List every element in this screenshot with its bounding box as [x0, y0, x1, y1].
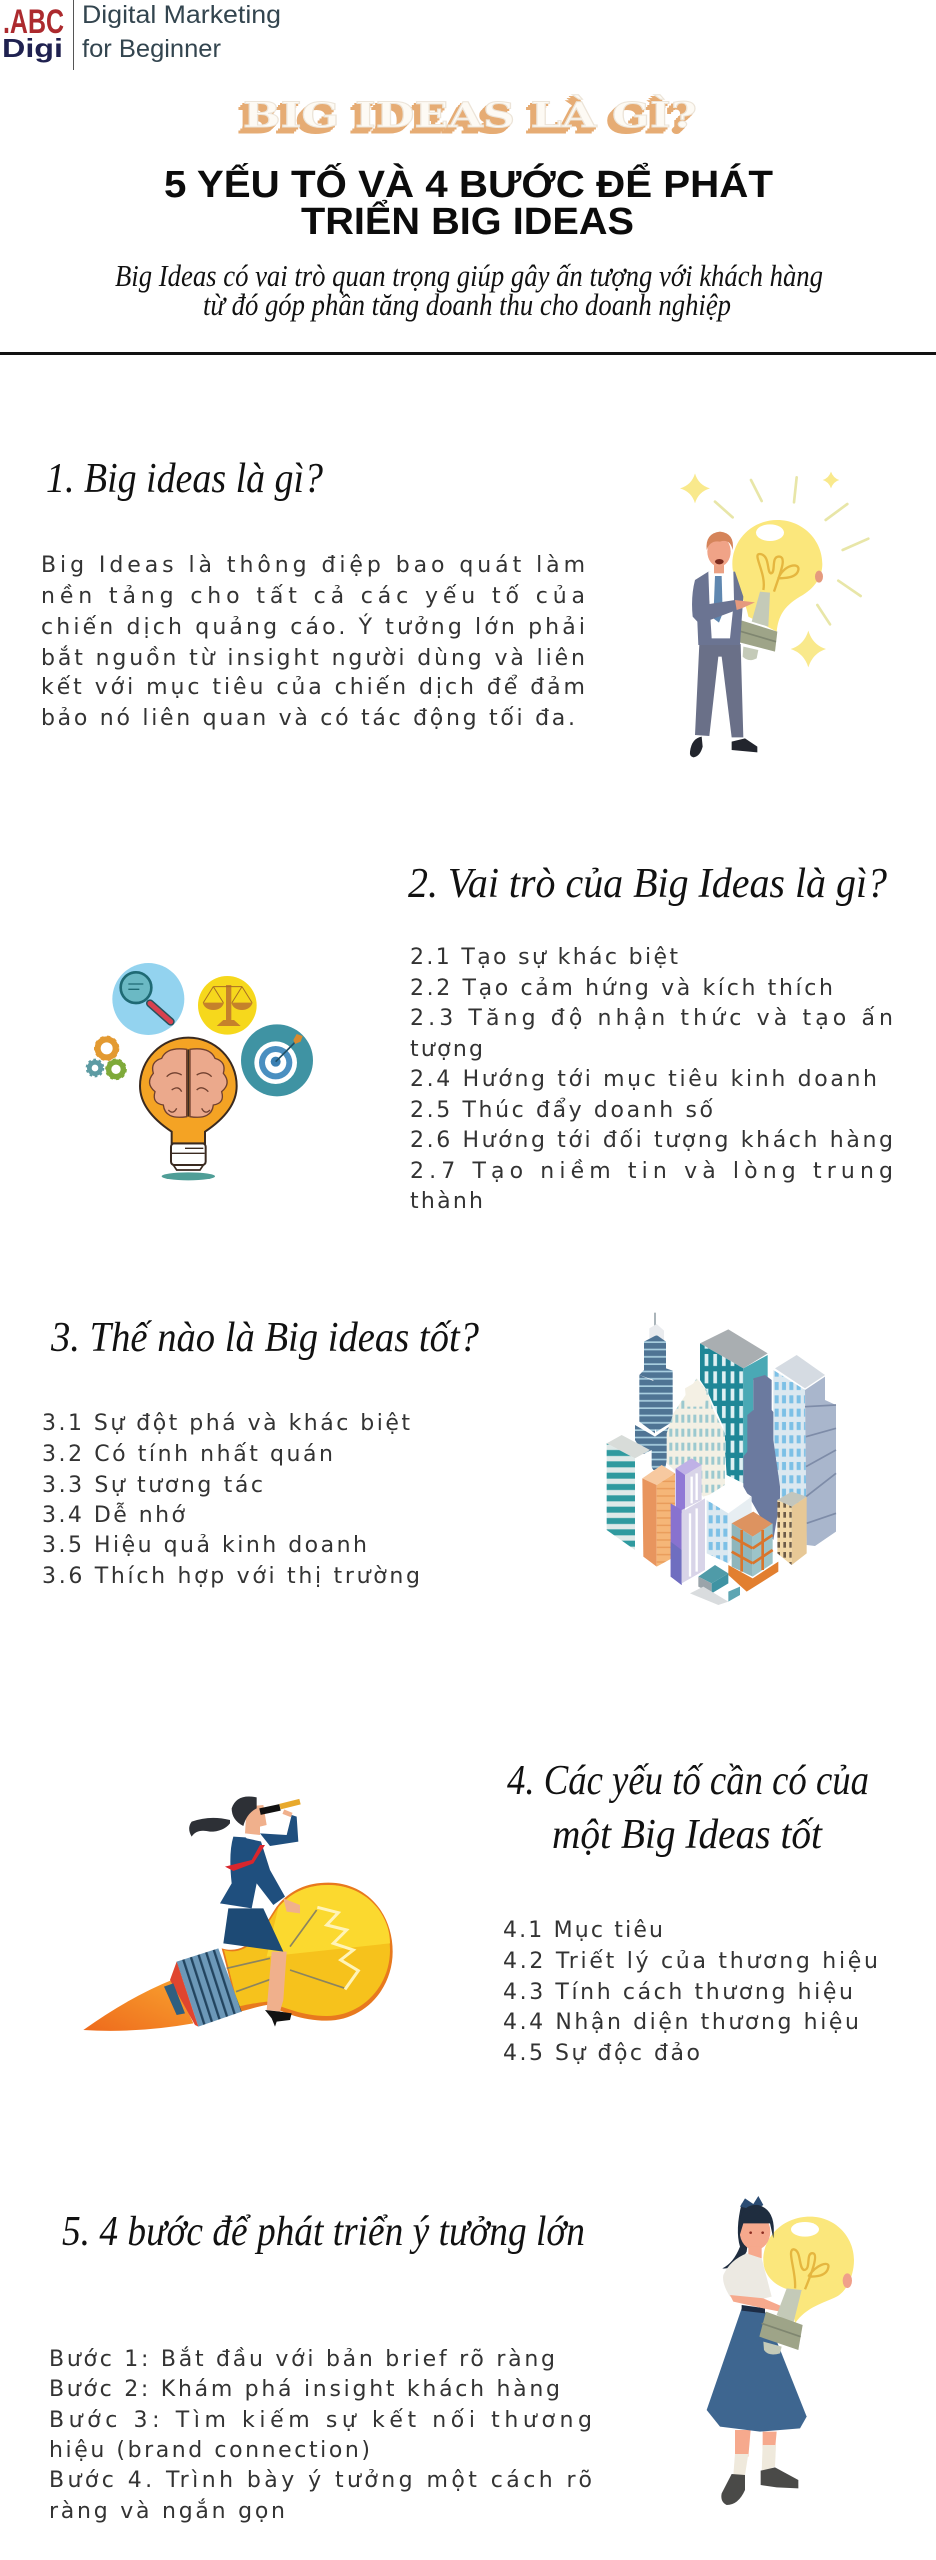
logo tagline	[82, 1, 281, 63]
heading: section 2: 2. Vai trò của Big Ideas là gì?	[408, 861, 887, 907]
text block: definition: chiến dịch quảng cáo. Ý tưởng lớn phải	[41, 614, 585, 640]
text block: role list	[410, 945, 893, 1214]
text block: four steps: hiệu (brand connection)	[49, 2438, 370, 2463]
text block: elements list: 4.3 Tính cách thương hiệu	[503, 1980, 853, 2005]
text block: four steps: Bước 3: Tìm kiếm sự kết nối thương	[49, 2408, 592, 2433]
text block: role list: 2.6 Hướng tới đối tượng khách hàng	[410, 1128, 893, 1153]
text block: good idea list: 3.4 Dễ nhớ	[42, 1502, 186, 1528]
text block: definition: nền tảng cho tất cả các yếu tố của	[41, 584, 585, 609]
panel: section 2	[87, 861, 893, 1214]
text block: four steps: Bước 2: Khám phá insight khách hàng	[49, 2377, 560, 2402]
text block: good idea list: 3.5 Hiệu quả kinh doanh	[42, 1533, 367, 1558]
text block: four steps: ràng và ngắn gọn	[49, 2499, 285, 2524]
text block: role list: 2.1 Tạo sự khác biệt	[410, 945, 678, 970]
panel: section 4	[83, 1758, 878, 2066]
text block: definition: Big Ideas là thông điệp bao quát làm	[41, 553, 585, 578]
text block: role list: 2.2 Tạo cảm hứng và kích thích	[410, 976, 833, 1001]
text block: good idea list: 3.1 Sự đột phá và khác biệt	[42, 1411, 410, 1436]
text block: good idea list: 3.3 Sự tương tác	[42, 1473, 263, 1498]
text block: four steps	[49, 2347, 592, 2524]
icon: brain bulb with circles	[87, 963, 313, 1180]
panel: section 1	[41, 456, 868, 757]
text block: role list: 2.5 Thúc đẩy doanh số	[410, 1098, 714, 1123]
text block: role list: 2.3 Tăng độ nhận thức và tạo ấn	[410, 1006, 893, 1031]
heading: section 1: 1. Big ideas là gì?	[46, 456, 323, 502]
text block: elements list: 4.1 Mục tiêu	[503, 1918, 663, 1943]
title badge: Big Ideas là gì: BIG IDEAS LÀ GÌ?	[243, 94, 697, 136]
text block: good idea list: 3.6 Thích hợp với thị trường	[42, 1564, 420, 1589]
heading: section 4: một Big Ideas tốt	[552, 1812, 823, 1858]
main heading: 5 YẾU TỐ VÀ 4 BƯỚC ĐỂ PHÁT	[164, 161, 773, 206]
logo mark: ABC Digi: Digi	[2, 33, 63, 63]
text block: four steps: Bước 4. Trình bày ý tưởng một cách rõ	[49, 2468, 592, 2493]
text block: definition: kết với mục tiêu của chiến dịch để đảm	[41, 675, 585, 700]
panel: section 5	[49, 2196, 854, 2524]
icon: girl holding light bulb	[707, 2196, 854, 2505]
heading: section 3: 3. Thế nào là Big ideas tốt?	[50, 1315, 479, 1361]
text block: elements list: 4.4 Nhận diện thương hiệu	[503, 2010, 859, 2035]
icon: isometric city buildings	[607, 1313, 836, 1605]
text block: definition	[41, 553, 585, 731]
text block: good idea list	[42, 1411, 420, 1589]
heading: section 5: 5. 4 bước để phát triển ý tưởng lớn	[62, 2209, 585, 2255]
text block: definition: bắt nguồn từ insight người dùng và liên	[41, 646, 585, 671]
text block: elements list	[503, 1918, 878, 2066]
logo mark: ABC Digi	[2, 3, 64, 63]
text block: role list: tượng	[410, 1037, 483, 1062]
icon: man holding light bulb	[680, 472, 868, 757]
heading: section 4	[507, 1758, 869, 1858]
icon: woman riding bulb rocket	[83, 1796, 393, 2031]
text block: role list: 2.7 Tạo niềm tin và lòng trung	[410, 1159, 893, 1184]
text block: elements list: 4.5 Sự độc đảo	[503, 2041, 700, 2066]
text block: role list: 2.4 Hướng tới mục tiêu kinh doanh	[410, 1067, 877, 1092]
subtitle: Big Ideas có vai trò quan trọng giúp gây ấn tượng với khách hàng	[115, 258, 823, 293]
text block: definition: bảo nó liên quan và có tác động tối đa.	[41, 706, 575, 731]
text block: role list: thành	[410, 1189, 483, 1214]
main heading	[164, 161, 773, 243]
text block: good idea list: 3.2 Có tính nhất quán	[42, 1442, 333, 1467]
text block: four steps: Bước 1: Bắt đầu với bản brief rõ ràng	[49, 2347, 555, 2372]
logo mark: ABC Digi: .ABC	[3, 3, 64, 41]
heading: section 4: 4. Các yếu tố cần có của	[507, 1758, 869, 1804]
header logo	[2, 0, 281, 70]
logo tagline: for Beginner	[82, 35, 221, 63]
logo tagline: Digital Marketing	[82, 1, 281, 29]
main heading: TRIỂN BIG IDEAS	[301, 198, 634, 243]
text block: elements list: 4.2 Triết lý của thương hiệu	[503, 1949, 878, 1974]
subtitle	[115, 258, 823, 322]
subtitle: từ đó góp phần tăng doanh thu cho doanh nghiệp	[203, 287, 731, 322]
panel: section 3	[42, 1313, 836, 1605]
